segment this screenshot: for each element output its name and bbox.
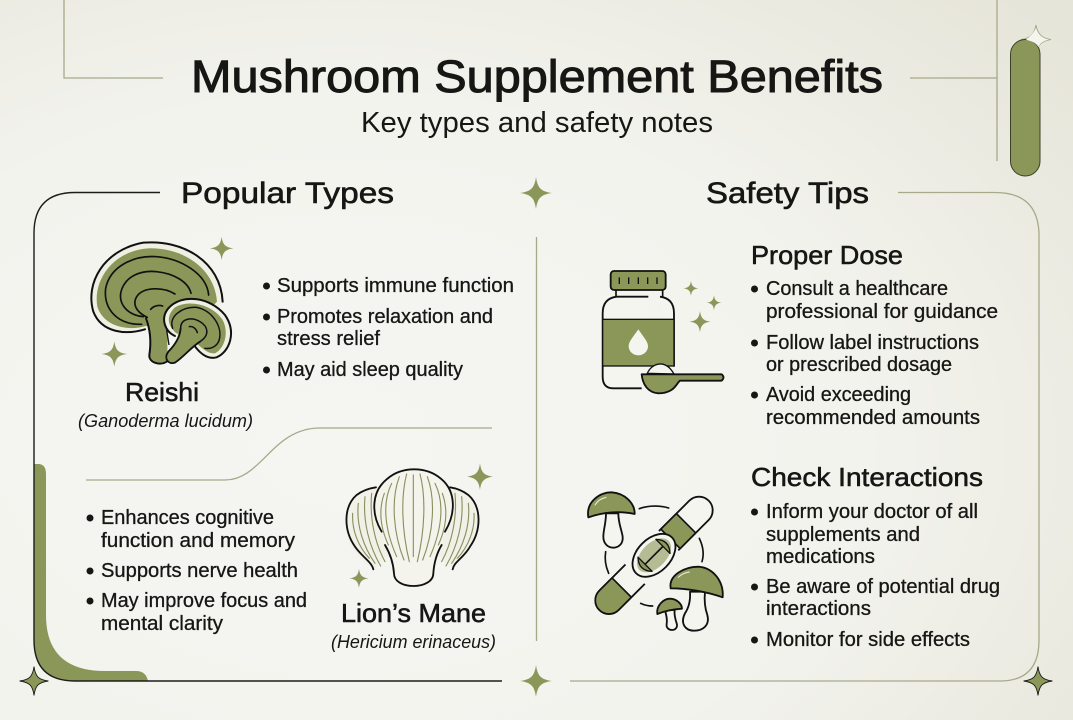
check interactions list: Monitor for side effects — [766, 629, 970, 651]
decorative frame: top left — [64, 0, 163, 78]
star: bottom right — [1024, 667, 1052, 695]
icon: mushrooms and capsule interaction — [588, 489, 723, 631]
panel: safety tips — [570, 177, 1039, 681]
reishi name: (Ganoderma lucidum) — [78, 411, 253, 431]
icon: reishi mushroom — [91, 237, 233, 367]
title: Mushroom Supplement Benefits — [191, 51, 883, 102]
reishi benefits list: stress relief — [277, 328, 380, 350]
lion's mane benefits list: May improve focus and — [101, 590, 307, 612]
heading: popular types: Popular Types — [181, 177, 394, 210]
proper dose list: recommended amounts — [766, 407, 980, 429]
icon: lion's mane mushroom — [345, 463, 493, 588]
lion's mane name: Lion’s Mane — [341, 598, 486, 628]
reishi name: Reishi — [125, 377, 199, 407]
check interactions heading: Check Interactions — [751, 462, 983, 492]
check interactions list: Inform your doctor of all — [766, 501, 978, 523]
star: bottom left — [20, 667, 48, 695]
lion's mane benefits list — [86, 507, 307, 635]
reishi benefits list — [263, 275, 514, 381]
subtitle: Key types and safety notes — [361, 107, 713, 139]
reishi benefits list: Promotes relaxation and — [277, 306, 493, 328]
star: top center — [520, 177, 552, 209]
panel outline — [570, 192, 1039, 681]
reishi name — [78, 377, 253, 431]
decorative frame: top right — [910, 0, 997, 161]
lion's mane benefits list: Supports nerve health — [101, 560, 298, 582]
lion's mane name — [331, 598, 496, 652]
check interactions list: interactions — [766, 598, 871, 620]
proper dose list: Follow label instructions — [766, 332, 979, 354]
proper dose heading: Proper Dose — [751, 240, 903, 270]
proper dose list: or prescribed dosage — [766, 354, 952, 376]
reishi benefits list: Supports immune function — [277, 275, 514, 297]
lion's mane benefits list: function and memory — [101, 530, 295, 552]
panel outline — [34, 192, 502, 681]
divider curve — [86, 428, 492, 480]
panel: popular types — [34, 177, 514, 681]
lion's mane benefits list: Enhances cognitive — [101, 507, 274, 529]
proper dose list: professional for guidance — [766, 301, 998, 323]
proper dose list: Consult a healthcare — [766, 278, 948, 300]
heading: safety tips: Safety Tips — [706, 177, 869, 210]
lion's mane benefits list: mental clarity — [101, 613, 223, 635]
star: bottom center — [520, 665, 552, 697]
center divider — [536, 237, 538, 641]
check interactions list: supplements and — [766, 524, 920, 546]
check interactions list — [751, 501, 1000, 651]
check interactions list: medications — [766, 546, 875, 568]
icon: supplement bottle and scoop — [603, 271, 723, 393]
lion's mane name: (Hericium erinaceus) — [331, 632, 496, 652]
proper dose list — [751, 278, 998, 429]
proper dose list: Avoid exceeding — [766, 384, 911, 406]
reishi benefits list: May aid sleep quality — [277, 359, 463, 381]
decorative olive pill with star — [1010, 25, 1051, 176]
check interactions list: Be aware of potential drug — [766, 576, 1000, 598]
